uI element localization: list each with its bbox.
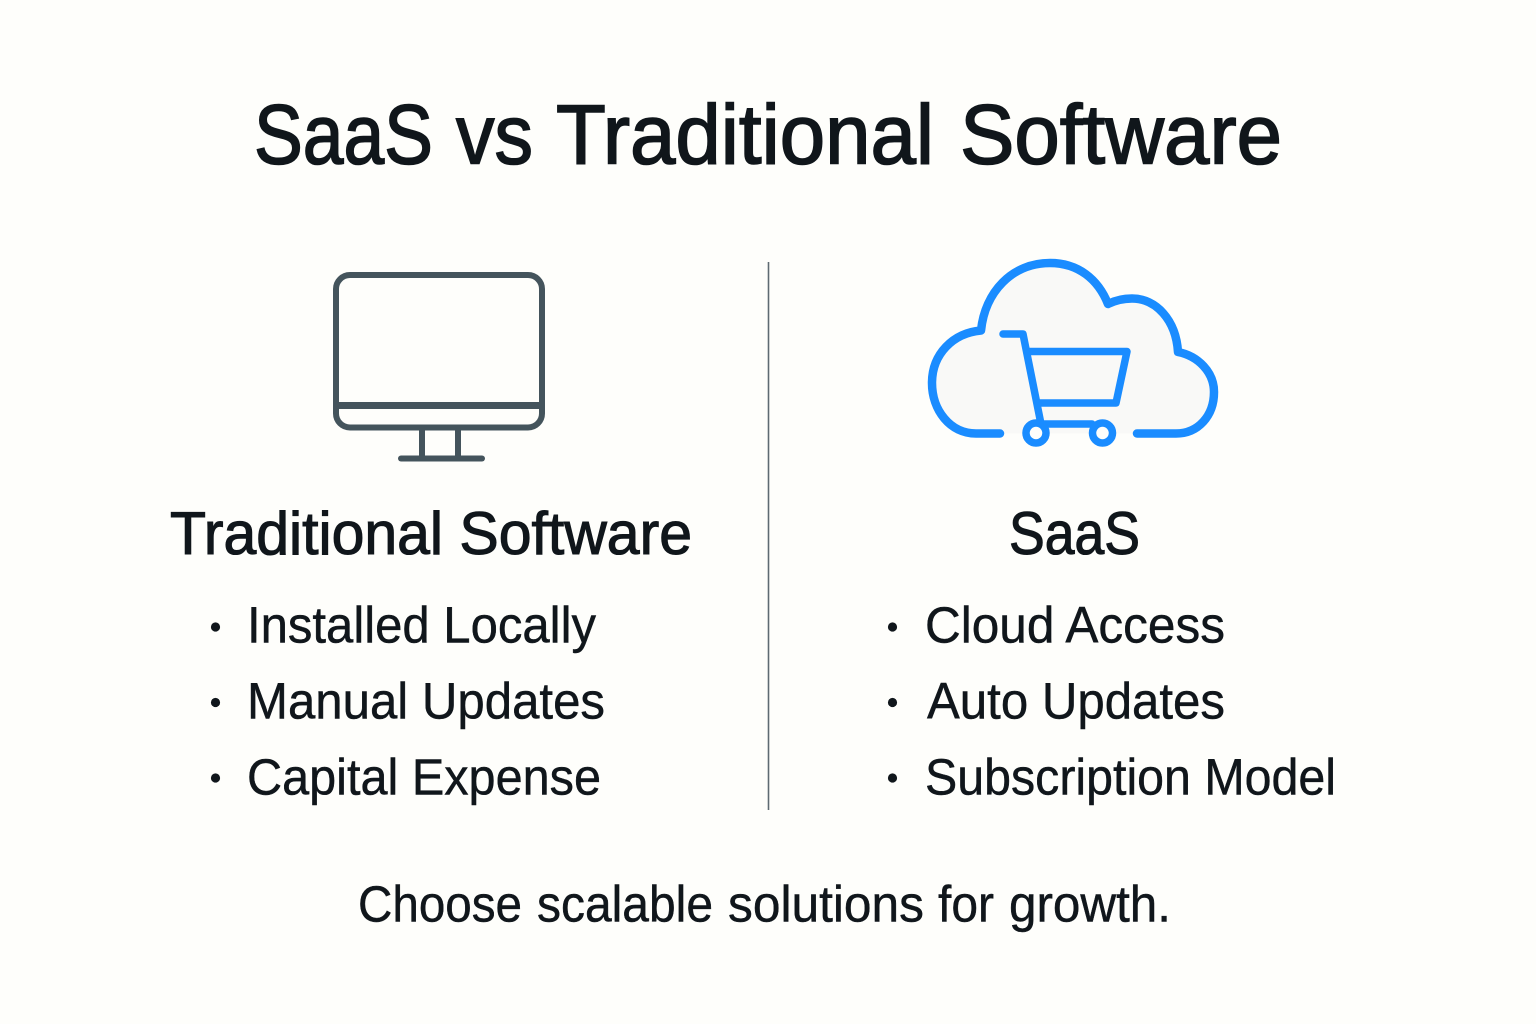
icon: desktop monitor — [336, 275, 542, 458]
panel: traditional software — [170, 275, 692, 806]
title: vs — [456, 88, 533, 182]
footer tagline: Choose — [358, 876, 522, 932]
icon: cloud with shopping cart — [932, 263, 1214, 443]
list: saas features — [888, 596, 1336, 806]
list: traditional software features: Installed Locally — [247, 596, 596, 654]
list: saas features: Auto Updates — [927, 672, 1225, 730]
title: SaaS — [254, 88, 433, 182]
footer tagline — [358, 876, 1171, 932]
list: traditional software features: Capital Expense — [247, 748, 601, 806]
footer tagline: growth. — [1009, 876, 1171, 932]
title — [254, 88, 1282, 182]
list: saas features: Subscription Model — [925, 748, 1336, 806]
list: saas features: Cloud Access — [925, 596, 1225, 654]
heading: saas: SaaS — [1009, 500, 1140, 567]
title: Traditional — [556, 88, 934, 182]
title: Software — [960, 88, 1282, 182]
panel: saas — [888, 263, 1336, 806]
list: traditional software features: Manual Updates — [247, 672, 605, 730]
list: traditional software features — [211, 596, 605, 806]
footer tagline: scalable — [537, 876, 713, 932]
footer tagline: solutions — [728, 876, 924, 932]
heading: traditional software: Traditional Software — [170, 500, 692, 567]
divider between columns — [768, 262, 770, 810]
footer tagline: for — [938, 876, 994, 932]
